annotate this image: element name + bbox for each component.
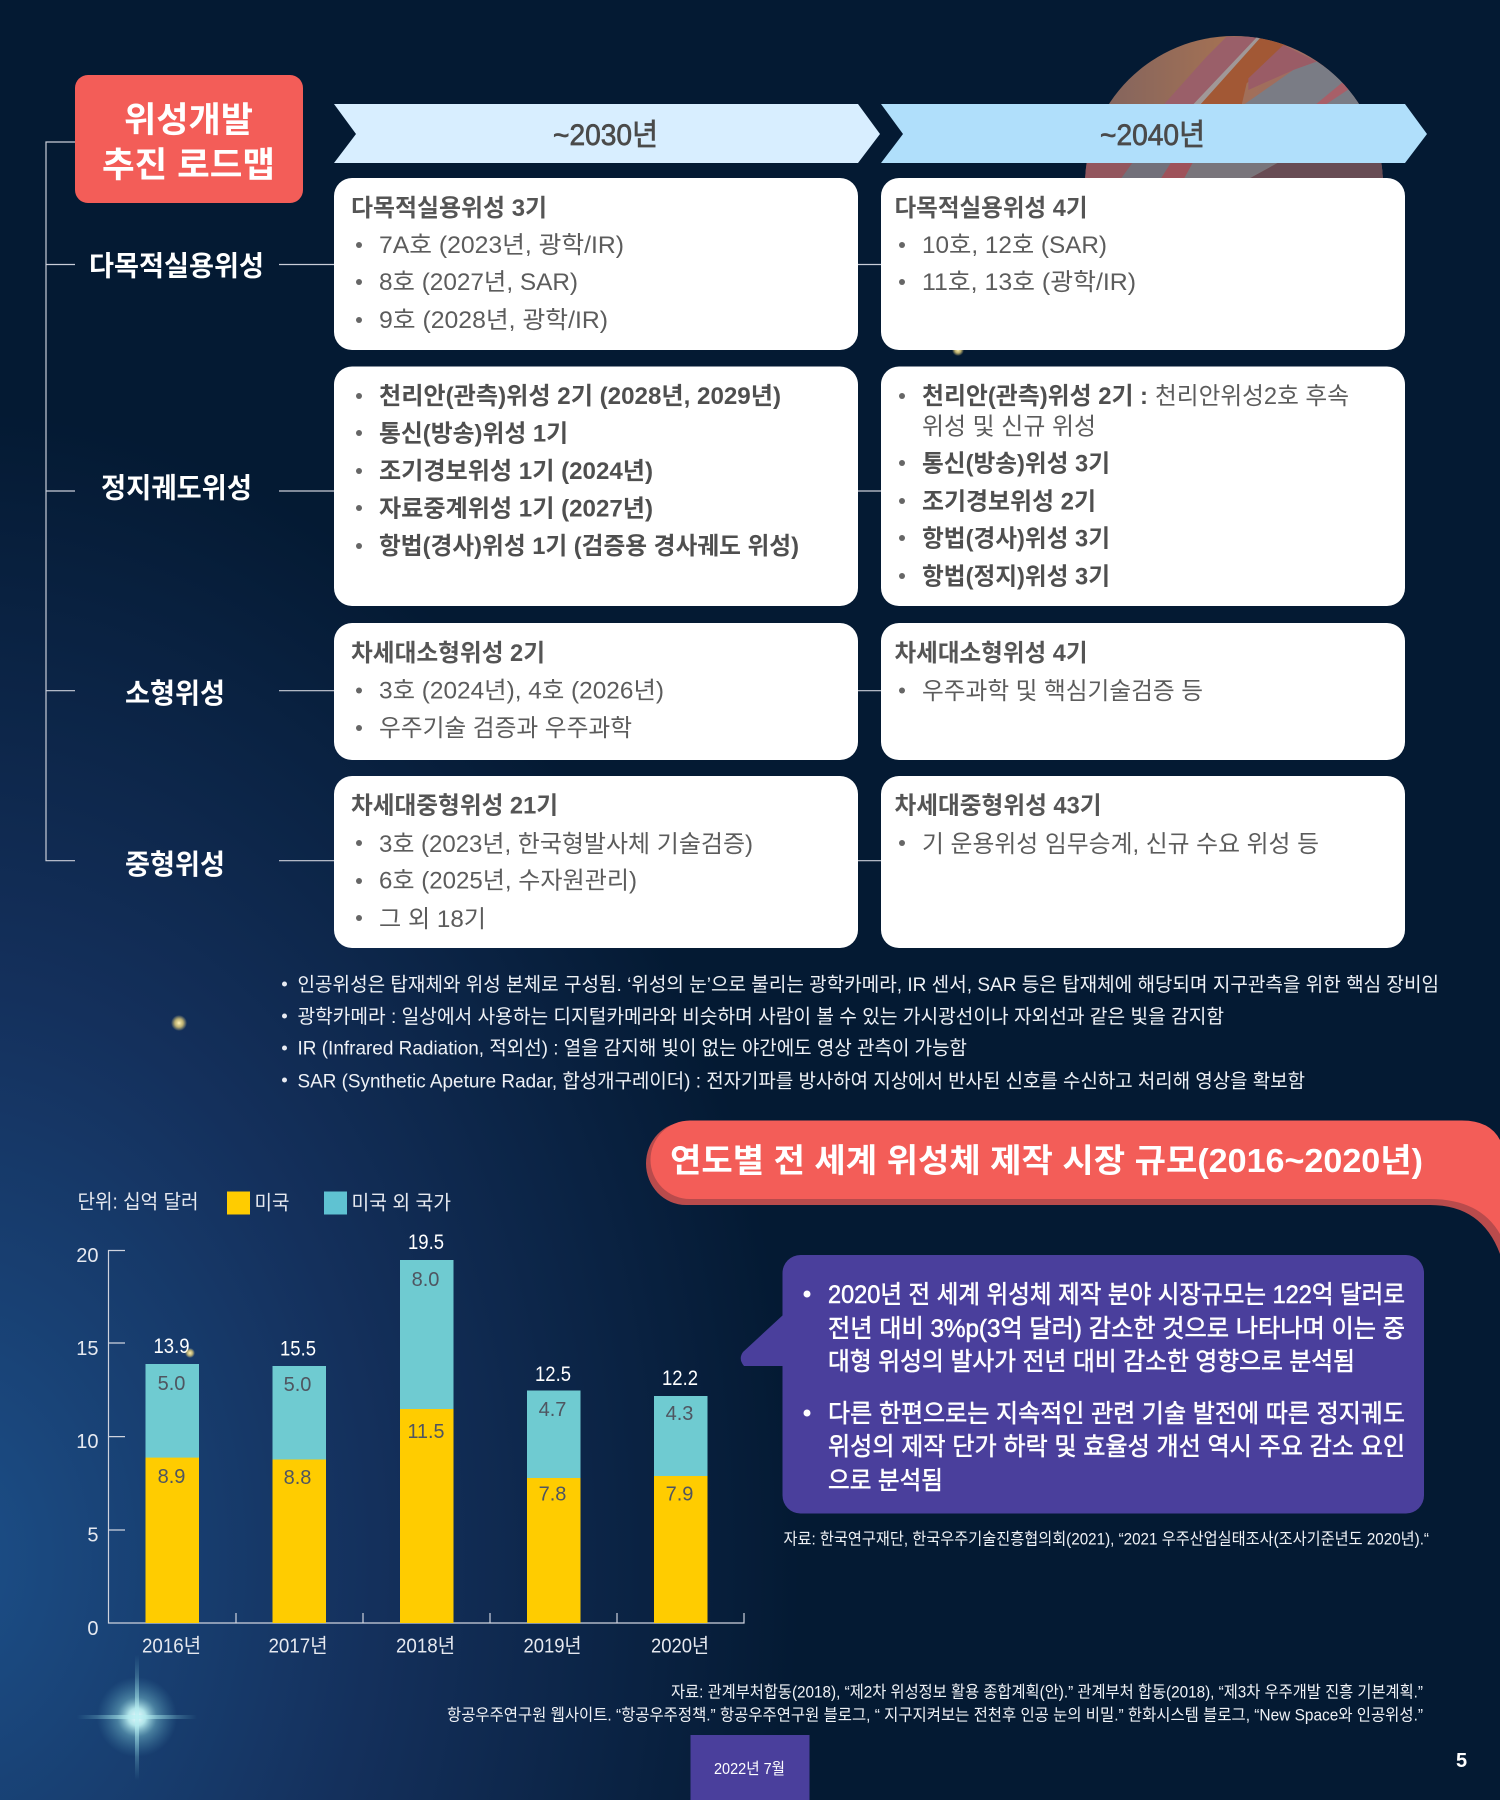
panel: geostationary 2040: 조기경보위성 2기 — [922, 488, 1096, 516]
panel: small satellite 2030: 우주기술 검증과 우주과학 — [379, 715, 632, 742]
bar: 2019: 4.7 — [539, 1399, 566, 1421]
panel: multipurpose 2040 — [881, 178, 1405, 350]
bar: 2016 — [142, 1335, 201, 1658]
panel: multipurpose 2030 — [334, 178, 858, 350]
decorative star: bottom left — [77, 1655, 197, 1780]
y axis — [76, 1245, 744, 1640]
panel: multipurpose 2030: 9호 (2028년, 광학/IR) — [379, 307, 608, 334]
panel: medium satellite 2040 — [881, 776, 1405, 948]
bar: 2016: 2016년 — [142, 1634, 201, 1658]
y axis: 20 — [76, 1245, 98, 1267]
y axis: 0 — [87, 1618, 98, 1640]
header arrow: ~2040 — [881, 104, 1427, 163]
bar: 2020: 7.9 — [666, 1484, 693, 1506]
category label: multipurpose: 다목적실용위성 — [89, 250, 264, 282]
callout: analysis: 위성의 제작 단가 하락 및 효율성 개선 역시 주요 감소 요인 — [828, 1433, 1405, 1461]
decorative star: near second card — [952, 344, 964, 356]
bar: 2016: 5.0 — [158, 1373, 185, 1395]
panel: multipurpose 2040: 다목적실용위성 4기 — [894, 195, 1088, 222]
bar: 2020 — [651, 1367, 709, 1658]
bar: 2018 — [396, 1231, 455, 1658]
panel: geostationary 2030: 통신(방송)위성 1기 — [379, 420, 568, 448]
bar: 2017: 15.5 — [280, 1338, 316, 1360]
bar: 2019: 7.8 — [539, 1484, 566, 1506]
title: roadmap box: 추진 로드맵 — [102, 146, 275, 185]
bar: 2019: 2019년 — [524, 1634, 582, 1658]
bar: 2020: 4.3 — [666, 1403, 693, 1425]
callout: analysis: 전년 대비 3%p(3억 달러) 감소한 것으로 나타나며 이는 중 — [828, 1315, 1405, 1343]
panel: geostationary 2040: 위성 및 신규 위성 — [922, 414, 1096, 440]
header arrow: ~2030 — [334, 104, 880, 163]
chart legend: 미국 — [254, 1192, 290, 1214]
callout: analysis — [741, 1255, 1424, 1514]
callout: analysis: 다른 한편으로는 지속적인 관련 기술 발전에 따른 정지궤도 — [828, 1400, 1405, 1428]
callout: analysis: 2020년 전 세계 위성체 제작 분야 시장규모는 122억 달러로 — [828, 1281, 1405, 1309]
panel: geostationary 2040: 천리안(관측)위성 2기 : — [922, 383, 1148, 410]
panel: geostationary 2030 — [334, 366, 858, 606]
panel: geostationary 2040: 통신(방송)위성 3기 — [922, 450, 1110, 478]
chart legend: 단위: 십억 달러 — [78, 1190, 198, 1214]
source note: page: 자료: 관계부처합동(2018), “제2차 위성정보 활용 종합계획(안).” 관계부처 합동(2018), “제3차 우주개발 진흥 기본계획.” — [671, 1682, 1423, 1702]
bar: 2017: 8.8 — [284, 1467, 311, 1489]
bar: 2020: 12.2 — [662, 1367, 698, 1390]
bar: 2020: 2020년 — [651, 1634, 709, 1658]
panel: small satellite 2030 — [334, 623, 858, 760]
y axis: 5 — [87, 1524, 98, 1546]
footer: date tab: 2022년 7월 — [714, 1760, 785, 1778]
source note: page: 항공우주연구원 웹사이트. “항공우주정책.” 항공우주연구원 블로그, “ 지구지켜보는 전천후 인공 눈의 비밀.” 한화시스템 블로그, “New Space와 인공위성.” — [447, 1706, 1423, 1724]
chart legend — [78, 1190, 451, 1214]
text block: technical notes: 인공위성은 탑재체와 위성 본체로 구성됨. ‘위성의 눈’으로 불리는 광학카메라, IR 센서, SAR 등은 탑재체에 해당되며 지구관측을 위한 핵심 장비임 — [298, 974, 1439, 996]
panel: medium satellite 2040: 차세대중형위성 43기 — [894, 792, 1102, 820]
panel: multipurpose 2040: 10호, 12호 (SAR) — [922, 232, 1107, 259]
title: roadmap box: 위성개발 — [124, 101, 253, 140]
tree connector lines — [46, 142, 881, 861]
bar: 2016: 8.9 — [158, 1466, 185, 1488]
text block: technical notes: IR (Infrared Radiation, 적외선) : 열을 감지해 빛이 없는 야간에도 영상 관측이 가능함 — [298, 1038, 967, 1060]
bar: 2018: 19.5 — [408, 1231, 444, 1254]
section banner: market size: 연도별 전 세계 위성체 제작 시장 규모(2016~2020년) — [670, 1142, 1423, 1179]
category label: medium satellite: 중형위성 — [125, 849, 225, 880]
panel: geostationary 2040 — [881, 366, 1405, 606]
callout: analysis: 으로 분석됨 — [828, 1467, 943, 1495]
bar: 2018: 8.0 — [412, 1269, 439, 1291]
bar: 2019 — [524, 1363, 582, 1658]
callout: analysis: 대형 위성의 발사가 전년 대비 감소한 영향으로 분석됨 — [828, 1348, 1355, 1376]
panel: geostationary 2030: 항법(경사)위성 1기 (검증용 경사궤도 위성) — [379, 533, 799, 560]
panel: geostationary 2030: 천리안(관측)위성 2기 (2028년, 2029년) — [379, 383, 781, 410]
header arrow: ~2040: ~2040년 — [1100, 119, 1205, 152]
text block: technical notes — [282, 974, 1439, 1092]
panel: medium satellite 2030: 3호 (2023년, 한국형발사체 기술검증) — [379, 831, 753, 858]
bar: 2016: 13.9 — [154, 1335, 190, 1358]
bar: 2018: 2018년 — [396, 1634, 455, 1658]
source note: page — [447, 1682, 1423, 1724]
panel: small satellite 2040: 우주과학 및 핵심기술검증 등 — [922, 678, 1203, 705]
chart legend: 미국 외 국가 — [352, 1192, 451, 1214]
panel: medium satellite 2030: 6호 (2025년, 수자원관리) — [379, 868, 637, 894]
panel: geostationary 2040: 천리안위성2호 후속 — [1155, 383, 1349, 410]
title: roadmap box — [75, 75, 303, 203]
decorative star: left middle — [171, 1015, 187, 1031]
panel: geostationary 2040: 항법(경사)위성 3기 — [922, 526, 1110, 552]
chart: stacked bars by year — [76, 1190, 744, 1658]
category label: small satellite: 소형위성 — [125, 678, 225, 709]
panel: geostationary 2030: 자료중계위성 1기 (2027년) — [379, 496, 653, 522]
bar: 2017: 2017년 — [268, 1634, 328, 1658]
panel: multipurpose 2030: 다목적실용위성 3기 — [351, 195, 547, 222]
panel: medium satellite 2030 — [334, 776, 858, 948]
text block: technical notes: 광학카메라 : 일상에서 사용하는 디지털카메라와 비슷하며 사람이 볼 수 있는 가시광선이나 자외선과 같은 빛을 감지함 — [298, 1006, 1224, 1028]
panel: small satellite 2030: 3호 (2024년), 4호 (2026년) — [379, 678, 664, 704]
decorative star: on chart label — [185, 1348, 195, 1358]
panel: multipurpose 2040: 11호, 13호 (광학/IR) — [922, 269, 1136, 296]
panel: geostationary 2040: 항법(정지)위성 3기 — [922, 564, 1110, 590]
panel: multipurpose 2030: 8호 (2027년, SAR) — [379, 269, 578, 296]
bar: 2017 — [268, 1338, 328, 1658]
panel: geostationary 2030: 조기경보위성 1기 (2024년) — [379, 458, 653, 485]
panel: small satellite 2040 — [881, 623, 1405, 760]
y axis: 10 — [76, 1431, 98, 1453]
bar: 2018: 11.5 — [408, 1421, 444, 1443]
panel: small satellite 2040: 차세대소형위성 4기 — [894, 640, 1088, 667]
panel: medium satellite 2040: 기 운용위성 임무승계, 신규 수요 위성 등 — [922, 831, 1319, 858]
y axis: 15 — [76, 1338, 98, 1360]
page number: 5 — [1456, 1750, 1467, 1772]
illustration: planet — [1085, 36, 1383, 178]
source note: callout: 자료: 한국연구재단, 한국우주기술진흥협의회(2021), “2021 우주산업실태조사(조사기준년도 2020년).“ — [784, 1530, 1429, 1548]
footer: date tab — [690, 1735, 810, 1800]
category label: geostationary: 정지궤도위성 — [101, 472, 252, 504]
section banner: market size — [646, 1120, 1500, 1254]
panel: multipurpose 2030: 7A호 (2023년, 광학/IR) — [379, 232, 624, 259]
panel: medium satellite 2030: 차세대중형위성 21기 — [351, 792, 558, 820]
panel: small satellite 2030: 차세대소형위성 2기 — [351, 640, 545, 667]
bar: 2017: 5.0 — [284, 1374, 311, 1396]
header arrow: ~2030: ~2030년 — [553, 119, 658, 152]
text block: technical notes: SAR (Synthetic Apeture Radar, 합성개구레이더) : 전자기파를 방사하여 지상에서 반사된 신호를 수신하고 처리해 영상을 확보함 — [298, 1070, 1305, 1092]
bar: 2019: 12.5 — [535, 1363, 571, 1386]
panel: medium satellite 2030: 그 외 18기 — [379, 906, 486, 933]
